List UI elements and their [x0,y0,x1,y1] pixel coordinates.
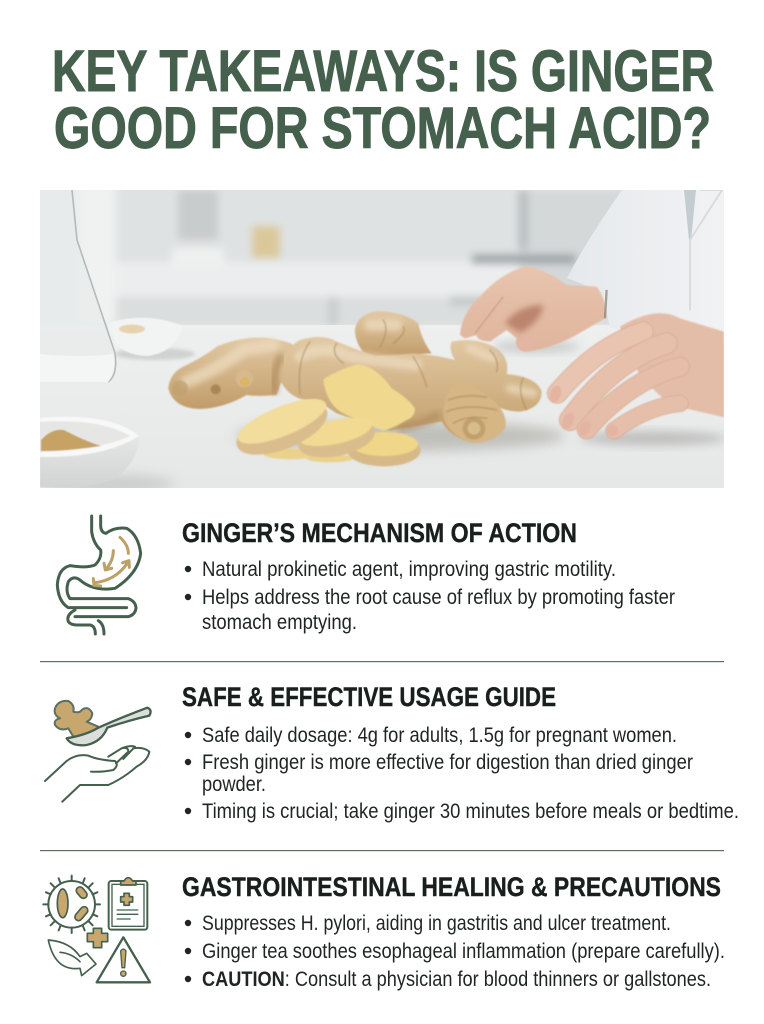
bullet list: Helps address the root cause of reflux by promoting faster [202,586,675,609]
icon: stomach with motility arrows [57,516,141,634]
white lab coat [567,190,724,325]
bullet list: powder. [202,773,266,796]
flask [40,190,116,382]
bullet list [185,912,725,991]
bullet list: Natural prokinetic agent, improving gastric motility. [202,558,616,581]
photo: ginger root on a laboratory table [40,190,724,488]
bullet list: stomach emptying. [202,611,357,634]
highlights on skin [187,325,533,393]
section 2: usage guide [45,682,739,823]
front hand [557,313,724,431]
bullet list [185,724,739,823]
section 1: mechanism of action [57,516,675,634]
icon: bacteria, clipboard, plus, leaf and warning [43,876,150,982]
heading: GINGER’S MECHANISM OF ACTION [182,518,577,548]
heading: SAFE & EFFECTIVE USAGE GUIDE [182,682,556,712]
background kitchen [40,190,622,325]
front bowl with ginger powder [40,417,175,493]
cut face [323,364,415,431]
scientist's hands [460,266,727,446]
slices [236,398,422,468]
bullet list: Fresh ginger is more effective for digestion than dried ginger [202,751,693,774]
rear hand [460,266,605,352]
ginger shadow [235,421,565,451]
section 3: healing and precautions [43,872,725,991]
icon: ginger on a spoon above a hand [45,701,151,802]
bullet list: Safe daily dosage: 4g for adults, 1.5g for pregnant women. [202,724,677,747]
bullet list: Suppresses H. pylori, aiding in gastritis and ulcer treatment. [202,912,671,935]
bullet list: CAUTION: Consult a physician for blood thinners or gallstones. [202,968,711,991]
bullet list [185,558,675,634]
ginger root [168,311,542,466]
title [52,39,714,161]
table top [40,325,724,490]
rear bowl [108,318,195,360]
